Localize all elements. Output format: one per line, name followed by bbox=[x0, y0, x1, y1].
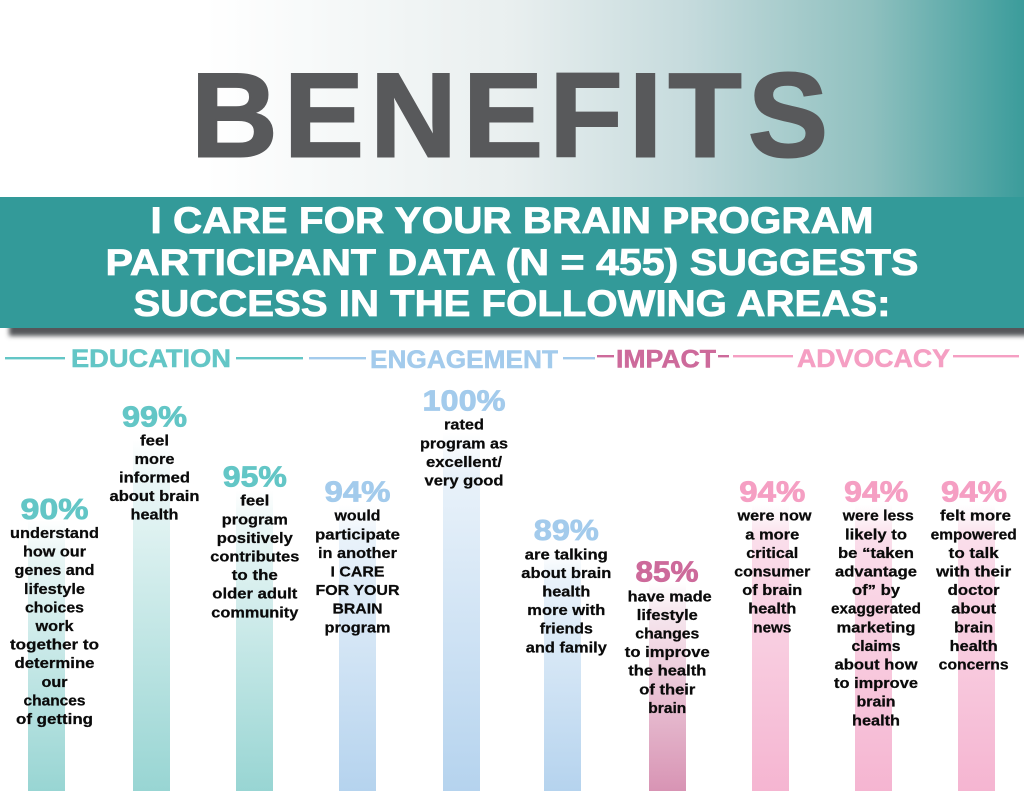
stat column: impact 85%: brain bbox=[648, 700, 686, 717]
stat column: engagement 94%: FOR YOUR bbox=[316, 582, 400, 599]
stat column: education 90%: genes and bbox=[14, 562, 94, 579]
stat column: advocacy 94% marketing claims bbox=[831, 477, 921, 791]
stat column: advocacy 94% marketing claims: brain bbox=[856, 694, 896, 711]
value 90%: 90% bbox=[20, 494, 89, 526]
stat column: engagement 100%: program as bbox=[420, 435, 508, 452]
stat column: education 95%: contributes bbox=[210, 548, 299, 566]
stat column: engagement 94%: would bbox=[333, 508, 380, 525]
value 94% marketing claims: 94% bbox=[844, 477, 908, 509]
stat column: impact 85%: the health bbox=[628, 663, 706, 680]
stat column: impact 85%: lifestyle bbox=[637, 607, 698, 624]
stat column: education 90%: choices bbox=[25, 599, 84, 616]
banner: program participant data: PARTICIPANT DATA (N = 455) SUGGESTS bbox=[106, 242, 918, 283]
stat column: advocacy 94% marketing claims: about how bbox=[834, 656, 918, 674]
stat column: education 90%: of getting bbox=[16, 711, 93, 728]
stat column: engagement 100%: excellent/ bbox=[426, 454, 503, 471]
stat column: engagement 94%: program bbox=[324, 619, 390, 636]
stat column: engagement 89%: are talking bbox=[525, 546, 608, 563]
stat column: engagement 100%: rated bbox=[444, 417, 484, 434]
bar 94% engagement bbox=[339, 505, 376, 791]
bar 94% marketing claims bbox=[855, 505, 892, 791]
stat column: engagement 89% bbox=[521, 515, 611, 791]
stat column: advocacy 94% marketing claims: be “taken bbox=[838, 545, 914, 562]
stat column: engagement 100% bbox=[420, 386, 508, 791]
category heading: advocacy: ADVOCACY bbox=[797, 345, 950, 373]
stat column: advocacy 94% critical consumer: a more bbox=[745, 526, 799, 543]
stat column: advocacy 94% empowered: empowered bbox=[931, 526, 1017, 543]
stat column: advocacy 94% marketing claims: were less bbox=[842, 508, 914, 525]
category heading: impact: IMPACT bbox=[616, 346, 716, 374]
stat column: advocacy 94% empowered: concerns bbox=[939, 656, 1009, 674]
stat column: education 95%: positively bbox=[217, 530, 294, 547]
stat column: engagement 89%: about brain bbox=[521, 565, 611, 582]
bar 85% bbox=[649, 583, 686, 791]
stat column: advocacy 94% empowered: to talk bbox=[949, 545, 999, 562]
value 95%: 95% bbox=[223, 462, 287, 494]
bar 94% empowered bbox=[958, 505, 995, 791]
stat column: engagement 89%: friends bbox=[540, 621, 593, 638]
stat column: education 90%: how our bbox=[23, 544, 86, 561]
stat column: education 95%: feel bbox=[240, 493, 269, 510]
stat column: engagement 94%: participate bbox=[315, 526, 400, 543]
stat column: advocacy 94% empowered: brain bbox=[954, 619, 993, 636]
stat column: education 95%: community bbox=[211, 604, 299, 621]
value 94% critical consumer: 94% bbox=[739, 477, 806, 509]
value 94% engagement: 94% bbox=[324, 477, 391, 509]
stat column: engagement 94%: I CARE bbox=[330, 564, 384, 580]
stat column: education 90%: chances bbox=[24, 692, 86, 709]
stat column: advocacy 94% empowered: felt more bbox=[940, 508, 1011, 525]
stat column: advocacy 94% marketing claims: claims bbox=[852, 638, 900, 655]
stat column: engagement 94% bbox=[315, 477, 400, 791]
stat column: advocacy 94% critical consumer: of brain bbox=[742, 582, 802, 599]
stat column: advocacy 94% marketing claims: health bbox=[852, 712, 900, 729]
category heading: engagement: ENGAGEMENT bbox=[370, 346, 558, 374]
stat column: education 99%: more bbox=[134, 451, 174, 468]
stat column: education 90%: work bbox=[34, 618, 74, 635]
stat column: advocacy 94% empowered bbox=[931, 477, 1017, 791]
bar 100% bbox=[443, 432, 480, 791]
stat column: education 90%: understand bbox=[10, 525, 99, 542]
stat column: engagement 100%: very good bbox=[424, 472, 504, 490]
stat column: impact 85%: to improve bbox=[625, 644, 710, 661]
value 89%: 89% bbox=[534, 515, 599, 547]
stat column: education 95%: older adult bbox=[212, 586, 297, 603]
stat column: education 90%: lifestyle bbox=[24, 581, 85, 598]
stat column: advocacy 94% empowered: about bbox=[951, 601, 996, 618]
bar 99% bbox=[133, 440, 170, 791]
stat column: engagement 89%: and family bbox=[526, 639, 608, 656]
stat column: education 99%: about brain bbox=[110, 488, 200, 505]
stat column: advocacy 94% critical consumer: were now bbox=[736, 508, 812, 525]
stat column: advocacy 94% marketing claims: advantage bbox=[835, 564, 917, 580]
stat column: advocacy 94% marketing claims: marketing bbox=[836, 619, 916, 636]
stat column: education 90% bbox=[10, 494, 99, 791]
stat column: education 95%: to the bbox=[232, 567, 278, 584]
stat column: education 99%: feel bbox=[140, 432, 169, 449]
banner: program participant data: I CARE FOR YOUR BRAIN PROGRAM bbox=[150, 200, 874, 241]
stat column: education 90%: together to bbox=[10, 637, 99, 654]
title: BENEFITS bbox=[191, 48, 833, 182]
category heading: education: EDUCATION bbox=[71, 345, 231, 373]
stat column: education 99% bbox=[110, 402, 200, 791]
stat column: advocacy 94% critical consumer: news bbox=[753, 619, 791, 636]
stat column: engagement 89%: health bbox=[542, 584, 590, 600]
stat column: advocacy 94% empowered: with their bbox=[935, 564, 1011, 580]
bar 89% bbox=[544, 552, 581, 791]
stat column: education 90%: our bbox=[42, 674, 68, 691]
banner: program participant data: SUCCESS IN THE FOLLOWING AREAS: bbox=[134, 283, 890, 324]
stat column: advocacy 94% empowered: health bbox=[950, 638, 998, 655]
bar 90% bbox=[28, 520, 65, 791]
bar 94% critical consumer bbox=[752, 505, 789, 791]
stat column: advocacy 94% empowered: doctor bbox=[948, 582, 1000, 599]
stat column: advocacy 94% critical consumer bbox=[734, 477, 812, 791]
value 94% empowered: 94% bbox=[941, 477, 1007, 509]
stat column: education 99%: informed bbox=[119, 470, 190, 486]
banner: program participant data bbox=[0, 197, 1024, 328]
stat column: engagement 94%: BRAIN bbox=[332, 601, 382, 618]
stat column: impact 85% bbox=[625, 557, 712, 791]
stat column: advocacy 94% marketing claims: exaggerated bbox=[831, 601, 921, 618]
stat column: advocacy 94% critical consumer: consumer bbox=[734, 564, 810, 580]
stat column: impact 85%: of their bbox=[639, 681, 695, 698]
stat column: education 95%: program bbox=[222, 511, 288, 528]
stat column: education 99%: health bbox=[130, 507, 178, 524]
stat column: engagement 89%: more with bbox=[527, 602, 605, 619]
stat column: education 95% bbox=[210, 462, 299, 791]
band drop shadow bbox=[9, 322, 1024, 336]
stat column: engagement 94%: in another bbox=[318, 545, 397, 562]
header background gradient bbox=[0, 0, 1024, 198]
stat column: impact 85%: have made bbox=[628, 588, 712, 605]
stat column: advocacy 94% marketing claims: to improve bbox=[834, 675, 918, 692]
stat column: advocacy 94% critical consumer: health bbox=[748, 601, 796, 618]
stat column: advocacy 94% marketing claims: of” by bbox=[852, 582, 901, 599]
value 85%: 85% bbox=[636, 557, 699, 589]
bar 95% bbox=[236, 490, 273, 791]
value 100%: 100% bbox=[422, 386, 506, 418]
value 99%: 99% bbox=[122, 402, 187, 434]
stat column: education 90%: determine bbox=[14, 655, 94, 672]
stat column: impact 85%: changes bbox=[635, 626, 699, 642]
stat column: advocacy 94% critical consumer: critical bbox=[746, 545, 798, 562]
stat column: advocacy 94% marketing claims: likely to bbox=[845, 526, 907, 543]
